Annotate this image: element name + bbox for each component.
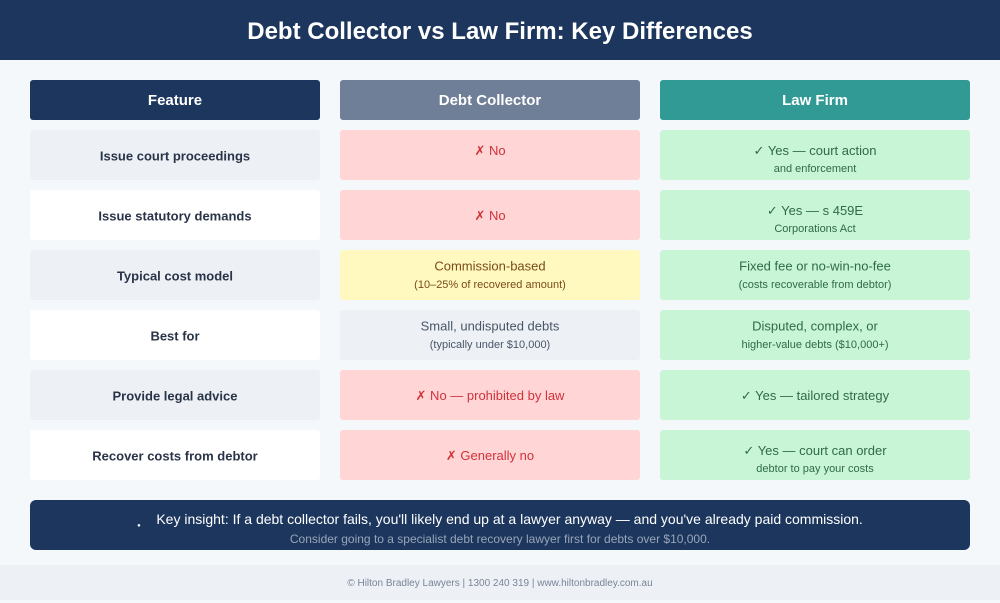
- title bar: [0, 0, 1000, 60]
- footer: © Hilton Bradley Lawyers | 1300 240 319 | www.hiltonbradley.com.au: [347, 578, 653, 589]
- row 4: Best for: Disputed, complex, or: [752, 318, 878, 334]
- header: Feature: [30, 80, 320, 120]
- row 6: Recover costs from debtor: [30, 430, 970, 480]
- row 3: Typical cost model: Typical cost model: [117, 268, 233, 284]
- row 5: Provide legal advice: Provide legal advice: [112, 388, 238, 404]
- row 1: Issue court proceedings: ✓ Yes — court action: [754, 143, 876, 158]
- row 5: Provide legal advice: [112, 370, 970, 420]
- row 3: Typical cost model: Fixed fee or no-win-no-fee: [739, 258, 891, 274]
- row 4: Best for: Best for: [150, 328, 200, 344]
- header: Feature: Feature: [148, 92, 202, 109]
- header: Debt Collector: [340, 80, 640, 120]
- row 2: Issue statutory demands: Corporations Act: [774, 223, 856, 235]
- row 4: Best for: Small, undisputed debts: [421, 318, 559, 334]
- row 4: Best for: higher-value debts ($10,000+): [741, 339, 889, 351]
- row 2: Issue statutory demands: Issue statutory demands: [98, 208, 252, 224]
- callout: key insight: Consider going to a specialist debt recovery lawyer first for debts over $10,000.: [290, 532, 710, 546]
- row 2: Issue statutory demands: ✓ Yes — s 459E: [767, 203, 863, 218]
- callout: key insight: ● Key insight: If a debt collector fails, you'll likely end up at a lawyer anyway — and you've already paid commission.: [137, 511, 863, 529]
- row 6: Recover costs from debtor: ✗ Generally no: [446, 448, 534, 463]
- row 3: Typical cost model: [117, 250, 970, 300]
- header: Debt Collector: Debt Collector: [439, 92, 541, 109]
- row 6: Recover costs from debtor: debtor to pay your costs: [756, 463, 874, 475]
- row 4: Best for: [30, 310, 970, 360]
- header: Law Firm: Law Firm: [782, 92, 848, 109]
- row 2: Issue statutory demands: ✗ No: [474, 208, 506, 223]
- row 4: Best for: (typically under $10,000): [430, 339, 550, 351]
- row 1: Issue court proceedings: ✗ No: [474, 143, 506, 158]
- row 1: Issue court proceedings: and enforcement: [774, 163, 856, 175]
- title bar: Debt Collector vs Law Firm: Key Differences: [247, 18, 753, 45]
- row 1: Issue court proceedings: [100, 130, 970, 180]
- row 3: Typical cost model: (10–25% of recovered amount): [414, 279, 566, 291]
- row 3: Typical cost model: (costs recoverable from debtor): [739, 279, 891, 291]
- row 6: Recover costs from debtor: Recover costs from debtor: [92, 448, 258, 464]
- row 5: Provide legal advice: ✗ No — prohibited by law: [416, 388, 564, 403]
- row 2: Issue statutory demands: [30, 190, 970, 240]
- row 6: Recover costs from debtor: ✓ Yes — court can order: [743, 443, 887, 458]
- callout: key insight: [30, 500, 970, 550]
- header: Law Firm: [660, 80, 970, 120]
- footer: [0, 565, 1000, 600]
- row 1: Issue court proceedings: Issue court proceedings: [100, 148, 250, 164]
- row 3: Typical cost model: Commission-based: [434, 258, 546, 274]
- row 5: Provide legal advice: ✓ Yes — tailored strategy: [741, 388, 889, 403]
